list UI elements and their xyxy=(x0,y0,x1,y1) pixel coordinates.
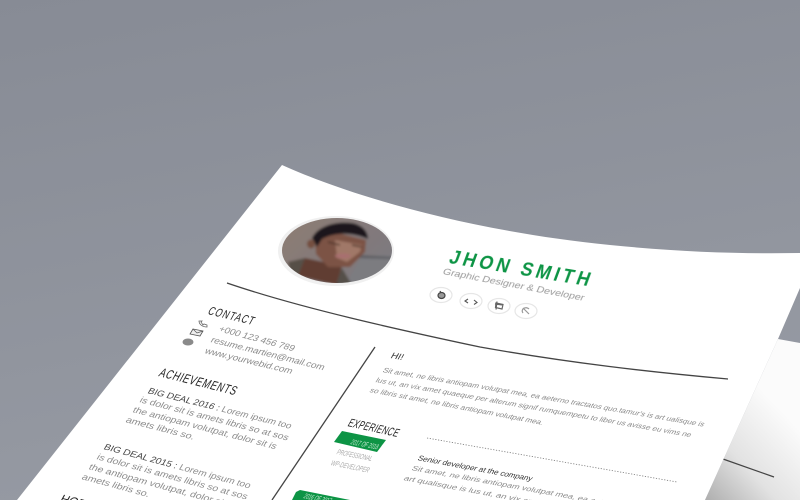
main resume page xyxy=(17,165,800,500)
icon: link xyxy=(515,304,537,318)
deal 2016: is dolor sit is amets libris so at sos xyxy=(138,395,291,442)
experience heading: EXPERIENCE xyxy=(346,416,402,440)
date badge xyxy=(334,431,386,452)
icon: code xyxy=(460,294,482,308)
header divider line xyxy=(227,283,728,379)
experience section xyxy=(292,416,716,500)
profile photo xyxy=(275,215,400,287)
intro paragraph: lus ut, an vix amet quaeque per alterum signif rumquempetu to liber us avisse eu vims ne xyxy=(374,376,694,439)
dotted divider xyxy=(427,438,677,482)
icon: mail xyxy=(190,329,203,336)
contact section xyxy=(182,304,327,376)
deal 2015: amets libris so. xyxy=(80,472,152,499)
email: resume.martien@mail.com xyxy=(209,335,327,372)
website: www.yourwebid.com xyxy=(202,346,295,376)
icon: hand xyxy=(430,288,452,302)
second resume page xyxy=(705,339,800,500)
column divider xyxy=(272,347,375,500)
deal 2016: the antiopam volutpat, dolor sit is xyxy=(131,405,279,451)
intro paragraph: Sit amet, ne libris antiopam volutpat mea, ea aeterno tractatos quo.tamur's is art ualisque is xyxy=(381,366,707,428)
deal 2016: amets libris so. xyxy=(124,415,197,441)
date badge: 2017 OF 2018 xyxy=(349,438,381,451)
intro heading: HI! xyxy=(389,351,406,362)
achievements section xyxy=(58,366,294,500)
skill icons row xyxy=(430,288,537,318)
second date badge xyxy=(292,490,350,500)
deal 2016: BIG DEAL 2016 : Lorem ipsum too xyxy=(146,386,294,430)
achievements heading: ACHIEVEMENTS xyxy=(157,366,241,398)
job title: Senior developer at the company xyxy=(416,454,534,483)
intro paragraph: so libris sit amet, ne libris antiopam volutpat mea. xyxy=(368,386,546,427)
phone number: +000 123 456 789 xyxy=(217,324,297,353)
deal 2015: BIG DEAL 2015 : Lorem ipsum too xyxy=(102,442,253,490)
deal 2016 xyxy=(124,386,294,451)
intro section xyxy=(368,351,707,439)
contact heading: CONTACT xyxy=(206,304,258,328)
role labels: PROFESSIONAL xyxy=(335,448,375,463)
deal 2015: is dolor sit is amets libris so at sos xyxy=(95,452,250,500)
icon: crop xyxy=(488,298,510,314)
experience section: WP-DEVELOPER xyxy=(329,459,372,474)
icon: phone xyxy=(199,321,207,327)
name heading: JHON SMITH xyxy=(446,247,597,291)
icon: globe xyxy=(182,338,194,346)
job title: Graphic Designer & Developer xyxy=(441,267,586,303)
